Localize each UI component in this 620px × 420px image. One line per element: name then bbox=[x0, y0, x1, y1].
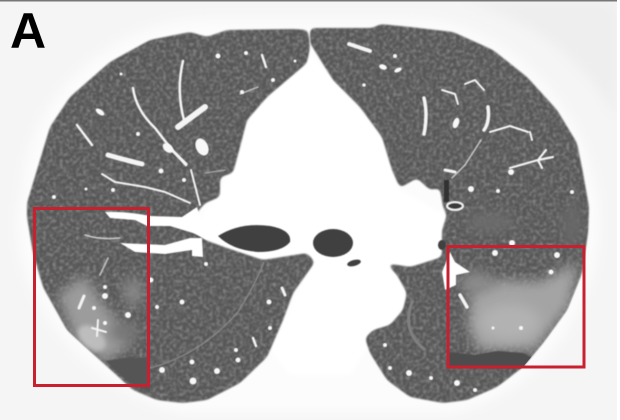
ground-glass opacity: image-left lung base bbox=[58, 275, 150, 392]
red highlight box: image-left lower lung bbox=[34, 208, 148, 386]
ground-glass opacity: image-right lung base bbox=[409, 203, 582, 369]
hilar vessels: bright bands over lungs bbox=[105, 207, 470, 290]
vessel dots bbox=[362, 54, 574, 392]
vessels bbox=[77, 55, 285, 368]
image-right lung bbox=[310, 24, 589, 403]
panel label A: A bbox=[10, 3, 46, 59]
vessels bbox=[349, 44, 553, 307]
vessel dots bbox=[52, 51, 296, 384]
image-left lung bbox=[27, 29, 315, 403]
red highlight box: image-right lower lung bbox=[448, 246, 584, 367]
mediastinum and spine: bright central tissue bbox=[195, 50, 445, 375]
bronchi: dark airways bbox=[218, 180, 463, 268]
